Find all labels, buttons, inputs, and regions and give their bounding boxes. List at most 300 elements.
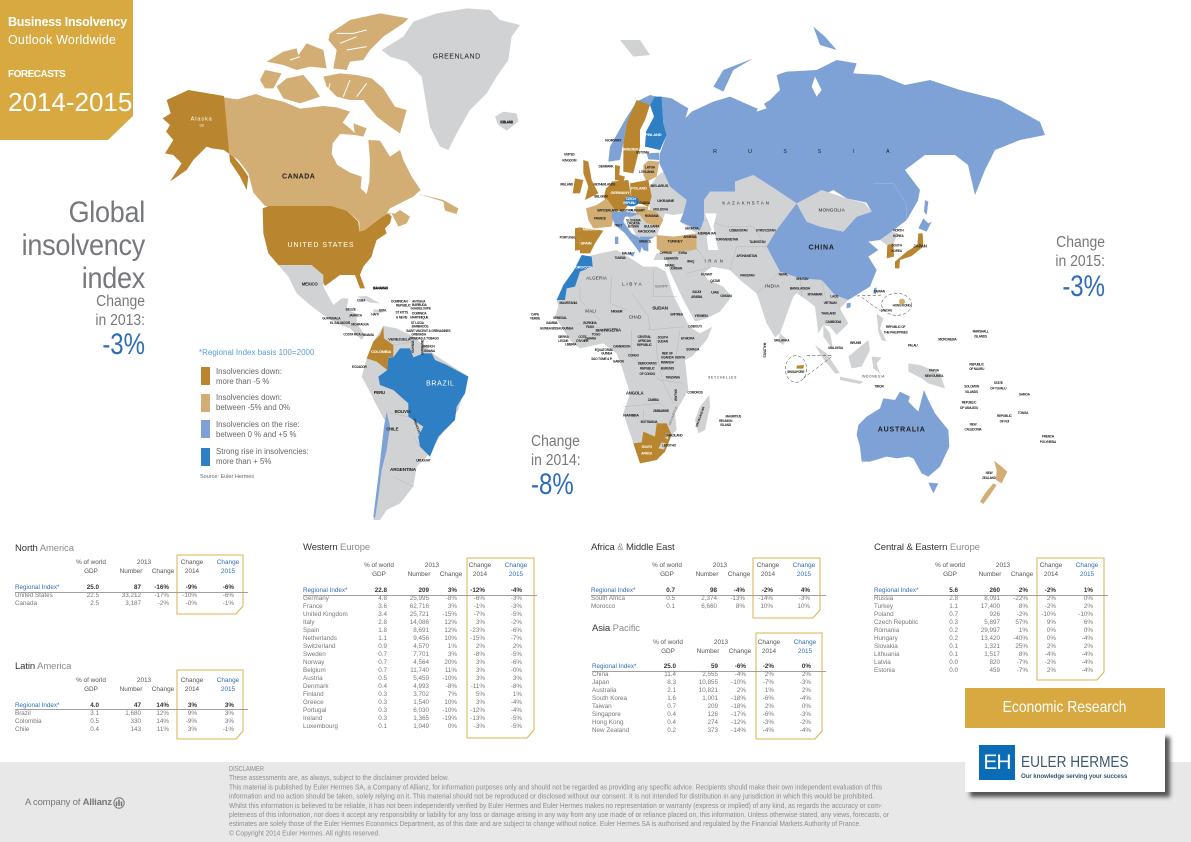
Eurasia labels: GERMANY bbox=[611, 190, 630, 195]
Czech Republic bbox=[624, 196, 639, 206]
column headers: 2015 bbox=[798, 648, 812, 654]
column headers: Number bbox=[696, 570, 718, 578]
legend text: Insolvencies down: bbox=[216, 393, 282, 402]
East Asia and Oceania labels: KOREA bbox=[891, 249, 903, 253]
data table: 59 bbox=[711, 663, 718, 670]
data table: 10,821 bbox=[699, 687, 718, 694]
Sri Lanka bbox=[778, 333, 786, 345]
Africa labels: MOZAMBIQUE bbox=[668, 406, 678, 426]
data table: 2% bbox=[802, 687, 811, 694]
data table: 0% bbox=[802, 663, 811, 670]
Eurasia labels: GREECE bbox=[639, 239, 651, 243]
Eurasia labels: MONGOLIA bbox=[818, 207, 846, 212]
column headers: 2015 bbox=[797, 570, 811, 578]
Latin America labels: ST LUCIA bbox=[411, 321, 425, 325]
Ireland bbox=[573, 178, 583, 193]
icon: EH square bbox=[979, 745, 1015, 780]
Taiwan and Hainan bbox=[847, 287, 877, 308]
data table: 2% bbox=[765, 671, 774, 678]
data table: 14% bbox=[156, 702, 169, 709]
Latin America bbox=[278, 265, 468, 520]
Eurasia labels: CROATIA bbox=[627, 222, 641, 226]
heading: Western Europe bbox=[303, 542, 370, 553]
Africa labels: ZIMBABWE bbox=[653, 409, 669, 413]
column headers bbox=[76, 676, 239, 692]
data table: -15% bbox=[470, 635, 485, 642]
data table: -14% bbox=[758, 595, 773, 602]
data table: Regional Index* bbox=[592, 663, 636, 670]
Eurasia labels: GEORGIA bbox=[685, 227, 699, 231]
Eurasia labels: A bbox=[886, 149, 890, 155]
Latin America labels: CHILE bbox=[386, 427, 399, 432]
data table: Japan bbox=[592, 679, 609, 686]
column headers: % of world bbox=[76, 676, 106, 684]
data table: Hungary bbox=[874, 635, 898, 642]
data table: 2% bbox=[1084, 603, 1093, 610]
East Asia and Oceania labels: TONGA bbox=[1018, 411, 1029, 415]
icon: Allianz eagle bbox=[113, 797, 125, 809]
Morocco bbox=[557, 255, 593, 300]
data table: Poland bbox=[874, 611, 894, 618]
legend text: between 0 % and +5 % bbox=[216, 430, 296, 439]
data table: 12% bbox=[444, 627, 457, 634]
Latin America labels: VENEZUELA bbox=[388, 337, 411, 342]
Eurasia labels: UKRAINE bbox=[657, 198, 675, 203]
Africa labels: GABON bbox=[613, 360, 625, 364]
data table: -12% bbox=[470, 587, 485, 594]
Latin America labels: GUADELOUPE bbox=[411, 307, 431, 311]
East Asia and Oceania labels: FRENCH bbox=[1042, 434, 1055, 438]
East Asia and Oceania labels: PALAU bbox=[908, 343, 918, 347]
data table: 0.3 bbox=[949, 619, 958, 626]
data table: -4% bbox=[1082, 667, 1093, 674]
Eurasia labels: SPAIN bbox=[581, 241, 592, 246]
data table: -4% bbox=[1045, 651, 1056, 658]
Caribbean islands bbox=[357, 296, 383, 313]
East Asia and Oceania labels: STATE bbox=[994, 381, 1003, 385]
data table: 0.5 bbox=[666, 595, 675, 602]
Africa labels bbox=[530, 313, 790, 455]
data table: 10% bbox=[444, 699, 457, 706]
data table bbox=[15, 584, 234, 607]
Latin America labels: DOMINICA bbox=[412, 312, 427, 316]
change in 2015 label: Change bbox=[1056, 234, 1105, 251]
icon: EH square: EH bbox=[983, 751, 1011, 774]
Eurasia labels: QATAR bbox=[710, 279, 721, 283]
panel: Latin America bbox=[15, 661, 248, 740]
column headers: Change bbox=[217, 676, 239, 684]
Latin America labels: ANTIGUA bbox=[412, 300, 426, 304]
North America labels: MEXICO bbox=[302, 282, 318, 287]
Africa labels: ETHIOPIA bbox=[681, 336, 695, 340]
Turkey bbox=[657, 233, 697, 253]
data table: -3% bbox=[763, 719, 774, 726]
Africa labels: SIERRA bbox=[558, 335, 570, 339]
data table: -5% bbox=[511, 723, 522, 730]
data table: 1% bbox=[448, 643, 457, 650]
legend swatch: down 0 to 5% bbox=[201, 394, 210, 412]
Poland bbox=[630, 180, 652, 207]
change value 2014: -8% bbox=[531, 468, 574, 501]
Eurasia labels: PORTUGAL bbox=[560, 235, 576, 239]
Africa labels: GUINEA BISSAU bbox=[540, 327, 563, 331]
data table: -3% bbox=[511, 603, 522, 610]
data table: -8% bbox=[511, 683, 522, 690]
data table: 209 bbox=[418, 587, 429, 594]
East Asia and Oceania labels: HONG KONG bbox=[893, 303, 911, 307]
Eurasia labels: FRANCE bbox=[594, 217, 606, 221]
panel: Western Europe bbox=[303, 542, 537, 738]
Mexico and Central America bbox=[278, 265, 365, 340]
data table: 4% bbox=[801, 587, 810, 594]
data table: Morocco bbox=[591, 603, 615, 610]
data table: -10% bbox=[731, 679, 746, 686]
Africa labels: CAPE bbox=[531, 313, 539, 317]
data table: -4% bbox=[734, 587, 745, 594]
data table: 0.3 bbox=[378, 707, 387, 714]
legend text: more than + 5% bbox=[216, 457, 271, 466]
report title bbox=[8, 15, 128, 47]
Singapore marker bbox=[797, 365, 804, 369]
Africa labels: CENTRAL bbox=[637, 335, 651, 339]
column headers: Change bbox=[152, 568, 174, 574]
legend swatch: rise 0 to 5% bbox=[201, 420, 210, 438]
data table: 14,086 bbox=[410, 619, 429, 626]
divider bbox=[592, 671, 826, 672]
data table: -6% bbox=[735, 663, 746, 670]
Eurasia labels: NIGER bbox=[611, 308, 623, 313]
data table: 2.8 bbox=[378, 619, 387, 626]
legend swatch: down more than 5% bbox=[201, 367, 210, 385]
data table: Australia bbox=[592, 687, 616, 694]
Canada bbox=[224, 13, 458, 232]
South America bbox=[362, 326, 468, 520]
data table: 2% bbox=[476, 643, 485, 650]
data table: Regional Index* bbox=[874, 587, 918, 594]
East Asia and Oceania labels: REPUBLIC OF bbox=[886, 325, 906, 329]
data table: Slovakia bbox=[874, 643, 898, 650]
data table: 0.0 bbox=[949, 667, 958, 674]
Eurasia labels: AFGHANISTAN bbox=[736, 254, 758, 258]
data table: 6,030 bbox=[413, 707, 429, 714]
column headers: 2015 bbox=[1080, 570, 1094, 578]
legend text bbox=[216, 393, 290, 412]
Latin America labels: PERU bbox=[374, 390, 385, 395]
Eurasia labels: TAJIKISTAN bbox=[749, 240, 766, 244]
data table: -4% bbox=[511, 587, 522, 594]
Latin America labels: EL SALVADOR bbox=[330, 321, 351, 325]
Africa labels: DJIBOUTI bbox=[688, 324, 702, 328]
Eurasia labels: UNITED bbox=[564, 153, 576, 157]
change in 2014 label: in 2014: bbox=[531, 452, 581, 469]
East Asia and Oceania labels: SAMOA bbox=[1019, 392, 1031, 396]
data table: 1.1 bbox=[378, 635, 387, 642]
data table: 0.1 bbox=[949, 643, 958, 650]
data table: -13% bbox=[470, 715, 485, 722]
Africa labels: GUINEA bbox=[562, 327, 574, 331]
North America labels: Alaska bbox=[191, 116, 213, 122]
data table: Belgium bbox=[303, 667, 326, 674]
column headers: Change bbox=[469, 562, 491, 568]
Eurasia labels: IRAQ bbox=[687, 259, 695, 263]
Latin America labels: BARBUDA bbox=[412, 303, 428, 307]
Eurasia labels: UZBEKISTAN bbox=[729, 228, 748, 232]
Eurasia labels: KINGDOM bbox=[562, 158, 577, 162]
data table: 4,564 bbox=[413, 659, 429, 666]
data table: Chile bbox=[15, 726, 29, 733]
North America and Greenland bbox=[163, 8, 520, 290]
column headers: GDP bbox=[943, 570, 957, 578]
data table: France bbox=[303, 603, 323, 610]
Latin America labels: REPUBLIC bbox=[396, 304, 412, 308]
Eurasia labels: PAKISTAN bbox=[740, 273, 755, 277]
Singapore callout bbox=[785, 356, 832, 382]
data table: 0.9 bbox=[378, 643, 387, 650]
Eurasia labels: AZERBAIJAN bbox=[697, 232, 717, 236]
Eurasia labels: TURKEY bbox=[667, 239, 683, 244]
data table: 98 bbox=[710, 587, 717, 594]
Finland bbox=[645, 97, 667, 150]
data table: -7% bbox=[763, 679, 774, 686]
legend source: Source: Euler Hermes bbox=[200, 474, 254, 480]
Latin America labels: & NEVIS bbox=[396, 315, 407, 319]
data table: 0.3 bbox=[378, 691, 387, 698]
data table: -0% bbox=[511, 667, 522, 674]
change value 2013: -3% bbox=[102, 328, 145, 361]
change in 2013: in 2013: bbox=[95, 312, 145, 329]
data table: 3% bbox=[188, 702, 197, 709]
column headers bbox=[652, 562, 815, 578]
data table: -4% bbox=[763, 727, 774, 734]
data table: 0.7 bbox=[667, 703, 676, 710]
data table: -6% bbox=[223, 584, 234, 590]
Southeast Asia islands bbox=[815, 313, 945, 388]
East Asia and Oceania labels: SOLOMON bbox=[964, 384, 980, 388]
column headers: GDP bbox=[660, 570, 674, 578]
Eurasia, Africa and Oceania bbox=[500, 27, 1057, 504]
Eurasia labels: SLOVAKIA bbox=[635, 201, 651, 205]
data table: 3% bbox=[225, 710, 234, 717]
column headers: 2014 bbox=[1044, 570, 1058, 578]
change in 2013: Change bbox=[96, 293, 145, 310]
column headers bbox=[76, 558, 239, 574]
data table: 1,365 bbox=[413, 715, 429, 722]
data table: 0.4 bbox=[667, 719, 676, 726]
United States bbox=[263, 206, 392, 288]
data table: 1,321 bbox=[984, 643, 1000, 650]
East Asia and Oceania labels: SINGAPORE bbox=[787, 370, 804, 374]
column headers: % of world bbox=[652, 562, 682, 568]
Latin America labels bbox=[302, 281, 455, 472]
Africa labels: BURUNDI bbox=[661, 367, 674, 371]
Africa labels: REPUBLIC bbox=[637, 343, 653, 347]
global insolvency index heading bbox=[22, 196, 146, 361]
data table: 0.5 bbox=[378, 675, 387, 682]
company text: A company of Allianz bbox=[25, 797, 112, 808]
disclaimer bbox=[229, 763, 899, 839]
Africa bbox=[555, 250, 712, 463]
data table: 2% bbox=[765, 703, 774, 710]
data table: 12% bbox=[156, 710, 169, 717]
data table: 1,680 bbox=[125, 710, 141, 717]
Eurasia labels: CHAD bbox=[629, 314, 642, 319]
Latin America labels: TRINIDAD & TOBAGO bbox=[409, 336, 439, 340]
data table: 2.5 bbox=[90, 600, 99, 607]
data table: 5.6 bbox=[949, 587, 958, 594]
United Kingdom bbox=[583, 160, 598, 200]
data table: 8% bbox=[1019, 603, 1028, 610]
data table: Norway bbox=[303, 659, 324, 666]
Eurasia labels: S bbox=[818, 149, 822, 155]
Eurasia labels: BULGARIA bbox=[644, 224, 660, 228]
data table: Regional Index* bbox=[15, 584, 59, 590]
Africa labels: GAMBIA bbox=[546, 321, 558, 325]
Africa labels: NAMIBIA bbox=[623, 412, 639, 417]
data table: 459 bbox=[989, 667, 1000, 674]
Hong Kong marker bbox=[899, 299, 905, 305]
Africa labels: BENIN bbox=[596, 328, 605, 332]
data table: 2.1 bbox=[667, 687, 676, 694]
Norway bbox=[608, 95, 657, 162]
Latin America labels: JAMAICA bbox=[349, 314, 363, 318]
data table: -19% bbox=[442, 715, 457, 722]
Eurasia labels: KUWAIT bbox=[701, 272, 713, 276]
Eurasia labels: ICELAND bbox=[500, 120, 514, 124]
Eurasia labels: LITHUANIA bbox=[639, 170, 655, 174]
data table: 11% bbox=[445, 667, 457, 674]
data table: -15% bbox=[442, 611, 457, 618]
data table: -17% bbox=[154, 592, 169, 599]
Africa labels: BURKINA bbox=[583, 321, 597, 325]
column headers: GDP bbox=[661, 648, 675, 654]
Mongolia bbox=[797, 190, 872, 232]
East Asia and Oceania labels: MARSHALL bbox=[973, 329, 989, 333]
New Zealand bbox=[980, 461, 1007, 504]
column headers: Change bbox=[181, 558, 203, 566]
data table: 0% bbox=[1084, 595, 1093, 602]
data table: 25,995 bbox=[410, 595, 429, 602]
data table: -10% bbox=[1078, 611, 1093, 618]
Arctic islands bbox=[620, 40, 650, 57]
data table: -3% bbox=[799, 595, 810, 602]
column headers: Change bbox=[1040, 562, 1062, 568]
column headers: % of world bbox=[935, 562, 965, 568]
Eurasia labels: ARABIA bbox=[691, 295, 703, 299]
South Korea bbox=[887, 243, 894, 258]
Latin America labels: BARBADOS bbox=[412, 325, 428, 329]
data table: China bbox=[592, 671, 608, 678]
data table: 11% bbox=[157, 726, 169, 733]
Africa labels: MALAWI bbox=[674, 389, 678, 401]
East Asia and Oceania labels: NEW bbox=[986, 471, 993, 475]
legend text: Insolvencies on the rise: bbox=[216, 420, 300, 429]
Eurasia labels: SWITZERLAND bbox=[597, 209, 619, 213]
column headers: Change bbox=[440, 570, 462, 578]
column headers bbox=[874, 560, 1104, 578]
data table: 373 bbox=[707, 727, 718, 734]
Eurasia labels: DENMARK bbox=[599, 165, 614, 169]
data table: 5% bbox=[476, 691, 485, 698]
data table: South Korea bbox=[592, 695, 627, 702]
data table: 2,374 bbox=[701, 595, 717, 602]
data table: 0.4 bbox=[90, 726, 99, 733]
data table: -10% bbox=[182, 592, 197, 599]
data table: Italy bbox=[303, 619, 315, 626]
Eurasia labels: NEPAL bbox=[779, 273, 788, 277]
Latin America labels: GUIANA bbox=[424, 349, 436, 353]
Africa labels: LIBERIA bbox=[565, 342, 577, 346]
data table: 0.7 bbox=[666, 587, 675, 594]
data table: -16% bbox=[154, 584, 169, 590]
data table: -8% bbox=[446, 595, 457, 602]
data table: 0.7 bbox=[378, 659, 387, 666]
East Asia and Oceania labels: REPUBLIC bbox=[997, 414, 1013, 418]
legend text: Insolvencies down: bbox=[216, 367, 282, 376]
Eurasia labels: AUSTRIA bbox=[620, 208, 633, 212]
column headers: 2014 bbox=[185, 686, 199, 692]
data table: -3% bbox=[474, 723, 485, 730]
column headers: 2013 bbox=[137, 558, 151, 566]
Latin America labels: NICARAGUA bbox=[351, 323, 370, 327]
data table: 4,570 bbox=[413, 643, 429, 650]
column headers bbox=[653, 638, 816, 654]
data table: 57% bbox=[1015, 619, 1028, 626]
divider bbox=[15, 709, 248, 710]
Africa labels: SOUTH bbox=[658, 335, 669, 339]
Sweden bbox=[623, 100, 650, 173]
data table: 87 bbox=[134, 584, 141, 590]
Eurasia labels: NORWAY bbox=[605, 137, 622, 142]
data table: -7% bbox=[474, 611, 485, 618]
East Asia and Oceania labels: ISLANDS bbox=[965, 390, 978, 394]
column headers: GDP bbox=[84, 568, 98, 574]
Africa labels: COMOROS bbox=[687, 390, 703, 394]
data table: 9% bbox=[1047, 619, 1056, 626]
Russia-China border bbox=[873, 183, 907, 220]
data table: -4% bbox=[511, 707, 522, 714]
data table: -11% bbox=[471, 683, 485, 690]
East Asia and Oceania labels: ISLANDS bbox=[974, 335, 987, 339]
column headers: % of world bbox=[76, 558, 106, 566]
Eurasia labels: SUDAN bbox=[652, 305, 669, 310]
data table: 1,517 bbox=[984, 651, 1000, 658]
Africa labels: REP. OF bbox=[662, 352, 673, 356]
data table: -4% bbox=[511, 699, 522, 706]
gold header block bbox=[0, 0, 133, 140]
data table: -1% bbox=[223, 600, 234, 607]
column headers: Change bbox=[794, 638, 816, 646]
data table: -2% bbox=[763, 663, 774, 670]
forecast box bbox=[1037, 558, 1104, 680]
data table: Turkey bbox=[874, 603, 893, 610]
data table: 25.0 bbox=[664, 663, 676, 670]
data table: -2% bbox=[1045, 603, 1056, 610]
data table: -1% bbox=[223, 726, 234, 733]
change in 2013 bbox=[95, 293, 145, 329]
data table: 0.4 bbox=[378, 683, 387, 690]
column headers: Change bbox=[728, 570, 750, 578]
column headers: 2013 bbox=[425, 562, 439, 568]
data table: 47 bbox=[134, 702, 141, 709]
data table: 0% bbox=[448, 723, 457, 730]
column headers: 2014 bbox=[761, 570, 775, 578]
Portugal bbox=[575, 227, 580, 251]
data table: 0.1 bbox=[666, 603, 675, 610]
Latin America labels: MEXICO bbox=[302, 281, 318, 286]
column headers: 2015 bbox=[509, 570, 523, 578]
legend text: more than -5 % bbox=[216, 377, 269, 386]
data table: 1.6 bbox=[667, 695, 676, 702]
